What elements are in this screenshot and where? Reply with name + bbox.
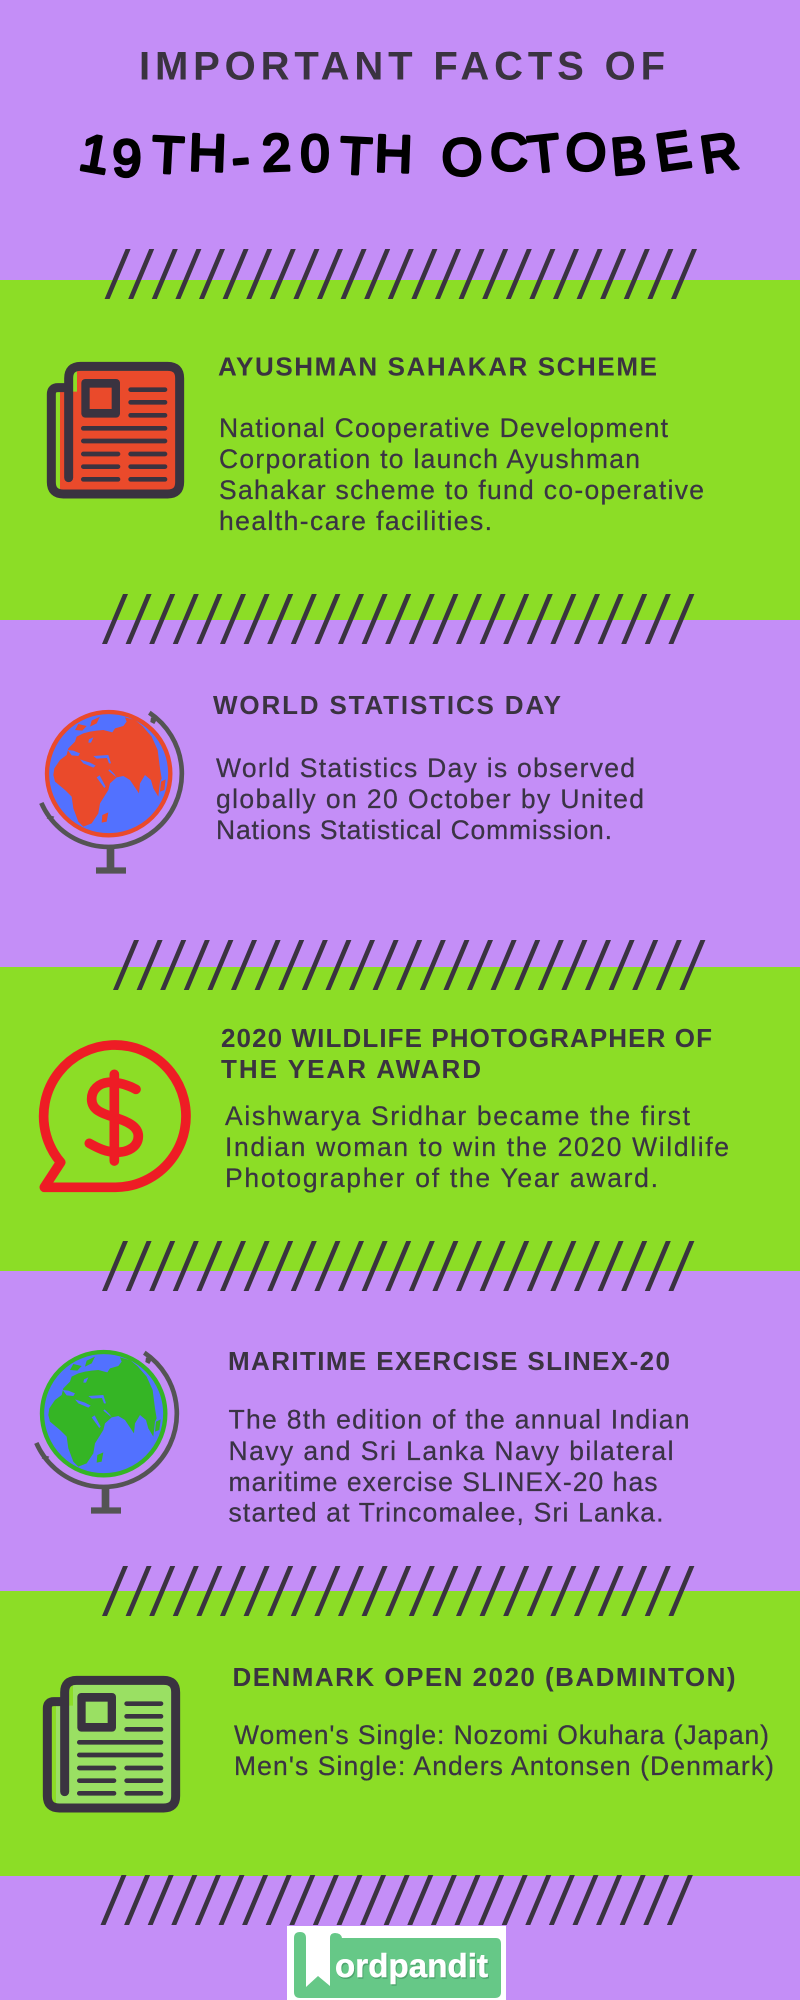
body text: Aishwarya Sridhar became the first <box>225 1101 691 1131</box>
icon: newspaper red <box>51 366 180 494</box>
heading: AYUSHMAN SAHAKAR SCHEME <box>218 352 657 382</box>
icon: dollar speech bubble <box>44 1045 186 1187</box>
divider hatch 6 <box>100 1875 693 1925</box>
heading <box>221 1023 712 1084</box>
body text: started at Trincomalee, Sri Lanka. <box>228 1498 664 1528</box>
divider hatch 2 <box>102 594 694 644</box>
body text <box>219 413 704 536</box>
body text: Photographer of the Year award. <box>225 1163 658 1193</box>
heading: WORLD STATISTICS DAY <box>213 690 561 720</box>
body text <box>228 1404 690 1528</box>
logo: Wordpandit <box>287 1926 506 2000</box>
body text <box>216 753 644 845</box>
body text: Indian woman to win the 2020 Wildlife <box>225 1132 729 1162</box>
body text <box>225 1101 729 1193</box>
panel: Maritime Exercise <box>0 1271 800 1591</box>
icon: globe red <box>41 712 182 874</box>
body text: maritime exercise SLINEX-20 has <box>228 1467 658 1497</box>
heading: THE YEAR AWARD <box>221 1054 481 1084</box>
divider hatch 5 <box>102 1566 694 1616</box>
title: important facts of: IMPORTANT FACTS OF <box>139 44 665 88</box>
title: date: 19TH-20TH OCTOBER <box>75 121 742 188</box>
body text: health-care facilities. <box>219 506 492 536</box>
body text <box>234 1720 774 1781</box>
logo: Wordpandit: ordpandit <box>335 1947 488 1984</box>
heading: 2020 WILDLIFE PHOTOGRAPHER OF <box>221 1023 712 1053</box>
panel: header <box>0 0 800 280</box>
panel: World Statistics Day <box>0 620 800 967</box>
divider hatch 1 <box>105 249 697 299</box>
body text: Navy and Sri Lanka Navy bilateral <box>228 1436 674 1466</box>
panel: Denmark Open <box>0 1591 800 1876</box>
body text: National Cooperative Development <box>219 413 669 443</box>
body text: Men's Single: Anders Antonsen (Denmark) <box>234 1751 774 1781</box>
heading: MARITIME EXERCISE SLINEX-20 <box>228 1346 670 1376</box>
body text: World Statistics Day is observed <box>216 753 635 783</box>
divider hatch 3 <box>113 940 705 990</box>
body text: Corporation to launch Ayushman <box>219 444 640 474</box>
divider hatch 4 <box>102 1241 694 1291</box>
body text: Nations Statistical Commission. <box>216 815 612 845</box>
panel: footer <box>0 1876 800 2000</box>
body text: The 8th edition of the annual Indian <box>228 1404 690 1434</box>
panel: Ayushman Sahakar Scheme <box>0 280 800 620</box>
body text: Sahakar scheme to fund co-operative <box>219 475 704 505</box>
icon: globe green <box>36 1352 177 1514</box>
body text: Women's Single: Nozomi Okuhara (Japan) <box>234 1720 769 1750</box>
panel: Wildlife Photographer <box>0 967 800 1271</box>
body text: globally on 20 October by United <box>216 784 644 814</box>
icon: newspaper green <box>47 1680 176 1808</box>
logo: Wordpandit: ordpandit <box>336 1948 489 1986</box>
heading: DENMARK OPEN 2020 (BADMINTON) <box>232 1662 736 1692</box>
